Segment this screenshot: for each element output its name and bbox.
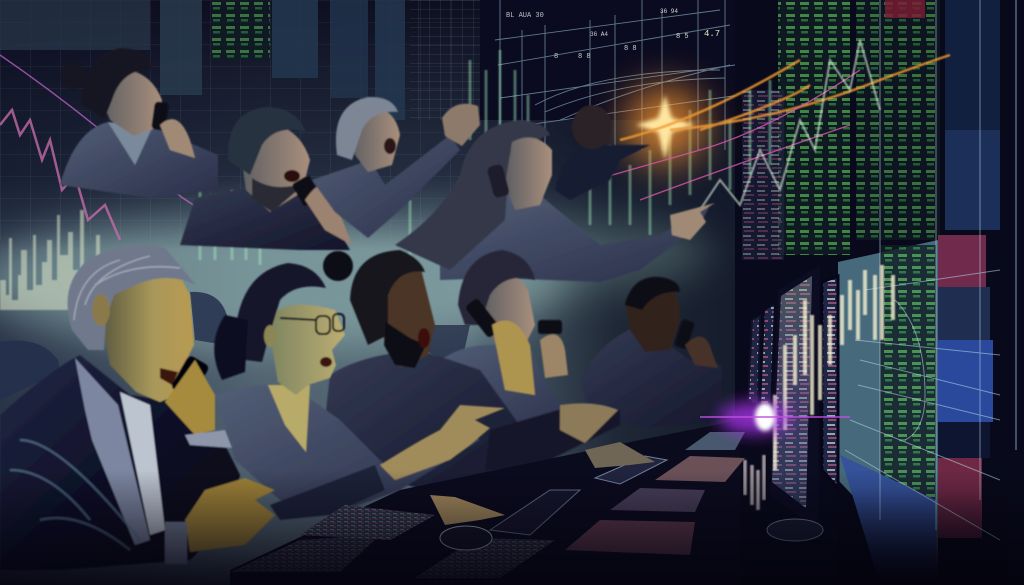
figure: woman with long hair pointing: [395, 120, 715, 282]
top centre data table: 36 94: [660, 8, 678, 15]
figure: bearded man top row: [180, 107, 352, 250]
figure: woman on phone fourth seat: [425, 250, 580, 440]
top centre data table: 4.98: [746, 62, 765, 71]
paper chart sheet: [565, 520, 695, 555]
chart wave magenta: [0, 55, 330, 234]
figure: black man on phone at far right: [580, 277, 740, 428]
hand on desk: [430, 495, 505, 525]
mid market spikes: [200, 50, 770, 270]
top centre data table: BL AUA 30: [506, 12, 544, 20]
upper dark shading: [0, 0, 780, 250]
right wall screen panels: [838, 0, 1017, 585]
top centre data table: 36 A4: [590, 31, 608, 38]
top centre data table: 8 5: [676, 33, 689, 41]
purple glow: [719, 402, 791, 434]
purple flare core: [755, 403, 775, 431]
monitor far left: [748, 316, 760, 405]
paper left: [230, 535, 380, 572]
left pink market line: [0, 110, 120, 240]
purple flare line: [700, 416, 850, 418]
background haze centre: [470, 210, 710, 290]
top centre data table: 8 8: [578, 53, 591, 61]
figure: woman with glasses: [214, 263, 505, 520]
top centre data table: 8 8: [624, 45, 637, 53]
mouse: [440, 526, 492, 550]
figure: woman top left on phone: [60, 48, 218, 198]
figure: grey-haired man front left: [0, 245, 275, 570]
top centre data table: 4.7: [704, 29, 720, 39]
top left screen grid: [0, 0, 480, 240]
monitor main: [767, 265, 823, 541]
monitor third: [822, 276, 838, 488]
orange flare glow: [625, 87, 705, 163]
papers far right: [685, 432, 745, 450]
orange trend lines: [620, 55, 950, 140]
keyboard right: [595, 456, 667, 484]
right upper data wall: [735, 0, 1024, 585]
left bar chart pale: [0, 210, 100, 310]
white price spikes over monitors: [775, 265, 893, 470]
white jagged chart right: [700, 40, 880, 210]
top centre data table: [480, 0, 775, 150]
keyboard: [490, 490, 580, 535]
orange flare core: [636, 95, 695, 160]
seat backs: [0, 292, 470, 400]
top centre data table: 8: [554, 53, 558, 61]
hand pointing lower: [585, 442, 655, 468]
monitor second: [760, 303, 775, 410]
magenta trend line: [560, 70, 860, 200]
silhouette: background figure: [555, 105, 650, 200]
paper upper: [610, 488, 705, 512]
paper far: [655, 456, 745, 482]
lower price spikes: [745, 455, 764, 510]
paper: [300, 505, 435, 540]
paper centre: [415, 538, 555, 578]
bottom fade: [0, 470, 1024, 585]
desk surface: [230, 420, 740, 585]
figure: man with bun and beard: [323, 250, 620, 495]
background haze: [0, 210, 570, 350]
figure: older man raising fist: [312, 97, 480, 238]
